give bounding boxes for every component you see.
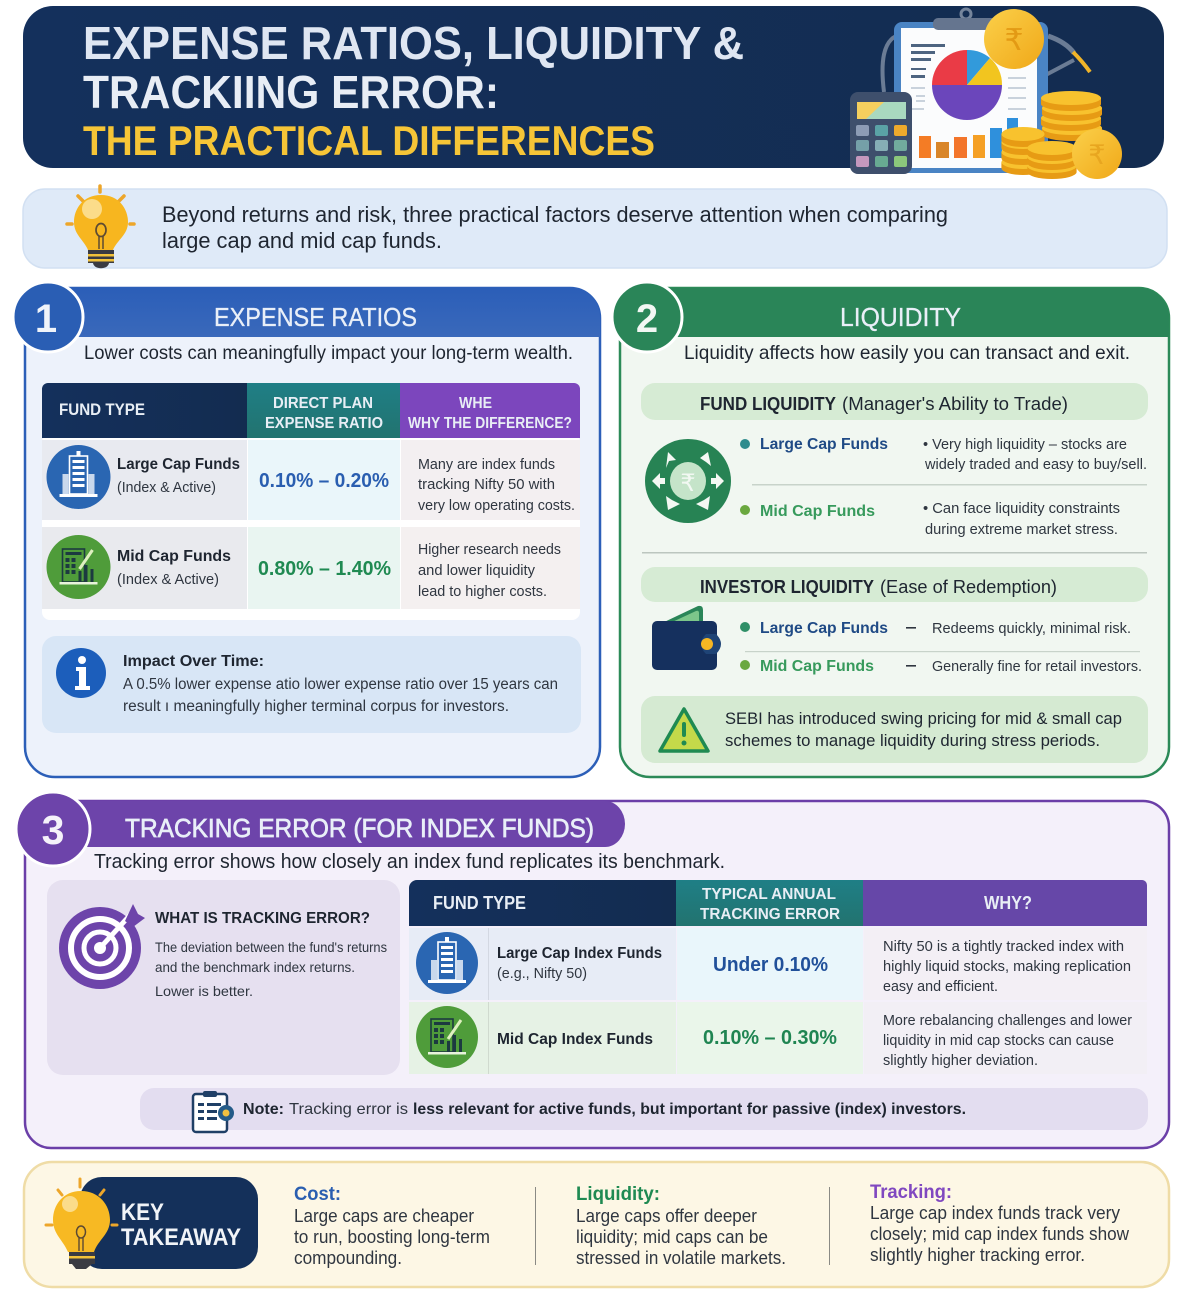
row: mid cap funds: lead to higher costs.: [418, 583, 547, 600]
takeaway: cost: Large caps are cheaper: [294, 1206, 474, 1226]
row: mid cap index funds: Mid Cap Index Funds: [497, 1031, 653, 1048]
row: large cap funds: tracking Nifty 50 with: [418, 476, 555, 493]
icon: rupee flow: ₹: [680, 469, 696, 497]
fund liquidity: mid cap: [740, 501, 1120, 538]
panel: expense ratios: [13, 282, 600, 777]
title: [83, 17, 744, 164]
tracking error table: [409, 880, 1147, 1074]
callout: impact over time: Impact Over Time:: [123, 653, 264, 670]
table header labels: EXPENSE RATIO: [265, 415, 383, 432]
card: what is tracking error: The deviation between the fund's returns: [155, 939, 387, 955]
number badge 1: 1: [35, 297, 57, 341]
table header labels: DIRECT PLAN: [273, 395, 373, 412]
number badge 2: [612, 282, 682, 352]
section: investor liquidity: (Ease of Redemption): [880, 577, 1057, 597]
row: large cap index funds: (e.g., Nifty 50): [497, 966, 587, 982]
title: TRACKIING ERROR:: [83, 66, 499, 118]
illustration: report, calculator and coins: ₹: [1004, 23, 1024, 58]
table header labels: TRACKING ERROR: [700, 906, 840, 923]
row: mid cap funds: 0.80% – 1.40%: [258, 558, 391, 580]
row: mid cap funds: and lower liquidity: [418, 562, 535, 579]
row: mid cap index funds: 0.10% – 0.30%: [703, 1027, 837, 1049]
note bar: [140, 1088, 1148, 1132]
row: mid cap funds: (Index & Active): [117, 571, 219, 588]
table header labels: FUND TYPE: [59, 400, 145, 419]
fund liquidity: large cap: [740, 436, 1147, 473]
table header labels: TYPICAL ANNUAL: [702, 886, 836, 903]
fund liquidity: mid cap: during extreme market stress.: [925, 522, 1118, 538]
section: investor liquidity: INVESTOR LIQUIDITY: [700, 577, 874, 597]
key takeaway badge: KEY: [121, 1199, 164, 1226]
illustration: report, calculator and coins: ₹: [1088, 140, 1106, 171]
table header labels: WHY?: [984, 893, 1032, 913]
row: large cap index funds: Large Cap Index Funds: [497, 945, 662, 962]
card: what is tracking error: WHAT IS TRACKING ERROR?: [155, 910, 370, 927]
takeaway: cost: Cost:: [294, 1184, 341, 1205]
icon: target: [59, 904, 145, 989]
investor liquidity: mid cap: Mid Cap Funds: [760, 658, 874, 675]
takeaway: liquidity: Large caps offer deeper: [576, 1206, 757, 1226]
takeaway: tracking: slightly higher tracking error.: [870, 1245, 1085, 1265]
table header labels: FUND TYPE: [433, 893, 526, 913]
table header labels: WHY THE DIFFERENCE?: [408, 415, 572, 432]
number badge 3: 3: [42, 807, 64, 853]
icon: rupee flow: [645, 439, 731, 523]
table header labels: [433, 886, 1032, 923]
row: large cap funds: Many are index funds: [418, 456, 555, 473]
row: large cap funds: Large Cap Funds: [117, 456, 240, 473]
table header labels: [59, 395, 572, 432]
number badge 1: [13, 282, 83, 352]
row: mid cap index funds: liquidity in mid cap stocks can cause: [883, 1033, 1114, 1049]
illustration: report, calculator and coins: [850, 9, 1122, 179]
takeaway: tracking: closely; mid cap index funds show: [870, 1224, 1130, 1244]
table header labels: WHE: [459, 395, 492, 412]
row: large cap funds: very low operating costs.: [418, 497, 575, 514]
investor liquidity: mid cap: Generally fine for retail investors.: [932, 659, 1142, 675]
takeaway: tracking: Tracking:: [870, 1182, 952, 1203]
card: what is tracking error: [47, 880, 400, 1075]
icon: wallet: [652, 606, 721, 670]
takeaway: tracking: Large cap index funds track very: [870, 1203, 1120, 1223]
callout: impact over time: result ı meaningfully higher terminal corpus for investors.: [123, 698, 509, 715]
panel: key takeaway: [24, 1162, 1169, 1287]
intro text: large cap and mid cap funds.: [162, 228, 442, 253]
row: large cap funds: [42, 440, 580, 520]
fund liquidity: large cap: widely traded and easy to buy/sell.: [924, 457, 1147, 473]
row: mid cap index funds: More rebalancing challenges and lower: [883, 1013, 1132, 1029]
intro callout: [23, 186, 1167, 268]
subtitle: Lower costs can meaningfully impact your long-term wealth.: [84, 342, 573, 364]
key takeaway badge: [46, 1177, 258, 1269]
intro text: Beyond returns and risk, three practical factors deserve attention when comparing: [162, 202, 948, 227]
row: large cap index funds: [409, 928, 1147, 1000]
header banner: [23, 6, 1164, 179]
takeaway: tracking: [870, 1182, 1130, 1265]
takeaway: cost: compounding.: [294, 1248, 402, 1268]
fund liquidity: mid cap: Mid Cap Funds: [760, 503, 875, 520]
callout: impact over time: A 0.5% lower expense atio lower expense ratio over 15 years can: [123, 676, 558, 693]
investor liquidity: large cap: [740, 620, 1131, 637]
title: THE PRACTICAL DIFFERENCES: [83, 117, 655, 164]
row: large cap index funds: Nifty 50 is a tightly tracked index with: [883, 939, 1124, 955]
number badge 3: [16, 792, 90, 866]
icon: light bulb: [67, 186, 134, 268]
row: mid cap index funds: [409, 1002, 1147, 1074]
section: fund liquidity: (Manager's Ability to Trade): [842, 394, 1068, 414]
title: EXPENSE RATIOS, LIQUIDITY &: [83, 17, 744, 69]
note bar: Tracking error is: [289, 1101, 408, 1118]
expense ratio table: [42, 383, 580, 620]
row: large cap index funds: highly liquid stocks, making replication: [883, 959, 1131, 975]
card: what is tracking error: Lower is better.: [155, 983, 253, 999]
takeaway: cost: to run, boosting long-term: [294, 1227, 490, 1247]
callout: SEBI swing pricing: [641, 696, 1148, 763]
key takeaway badge: TAKEAWAY: [121, 1224, 241, 1251]
callout: SEBI swing pricing: schemes to manage liquidity during stress periods.: [725, 732, 1100, 750]
takeaway: liquidity: [576, 1184, 786, 1268]
section: investor liquidity: [641, 567, 1148, 675]
takeaway: liquidity: stressed in volatile markets.: [576, 1248, 786, 1268]
row: large cap funds: 0.10% – 0.20%: [259, 470, 389, 492]
investor liquidity: large cap: Large Cap Funds: [760, 620, 888, 637]
fund liquidity: large cap: Large Cap Funds: [760, 436, 888, 453]
icon: clipboard: [193, 1091, 234, 1132]
intro text: [162, 202, 948, 253]
investor liquidity: large cap: Redeems quickly, minimal risk.: [932, 621, 1131, 637]
fund liquidity: large cap: • Very high liquidity – stocks are: [923, 437, 1127, 453]
note bar: less relevant for active funds, but important for passive (index) investors.: [413, 1101, 966, 1118]
note bar: Note:: [243, 1101, 284, 1118]
takeaway: liquidity: liquidity; mid caps can be: [576, 1227, 768, 1247]
row: mid cap funds: [42, 527, 580, 609]
subtitle: Tracking error shows how closely an index fund replicates its benchmark.: [94, 851, 725, 873]
takeaway: cost: [294, 1184, 490, 1268]
row: mid cap funds: Higher research needs: [418, 541, 561, 558]
heading: tracking error: TRACKING ERROR (FOR INDEX FUNDS): [125, 813, 594, 843]
subtitle: Liquidity affects how easily you can transact and exit.: [684, 342, 1130, 364]
row: mid cap funds: Mid Cap Funds: [117, 548, 231, 565]
icon: light bulb: [46, 1179, 117, 1269]
icon: info: [56, 648, 106, 698]
heading: expense ratios: EXPENSE RATIOS: [214, 302, 417, 332]
callout: impact over time: [42, 636, 581, 733]
row: large cap index funds: easy and efficient.: [883, 979, 998, 995]
panel: tracking error: [16, 792, 1169, 1148]
section: fund liquidity: FUND LIQUIDITY: [700, 394, 836, 414]
row: large cap funds: (Index & Active): [117, 479, 216, 496]
icon: warning triangle: [660, 709, 708, 751]
fund liquidity: mid cap: • Can face liquidity constraints: [923, 501, 1120, 517]
takeaway: liquidity: Liquidity:: [576, 1184, 660, 1205]
section: fund liquidity: [641, 383, 1148, 538]
investor liquidity: mid cap: [740, 658, 1142, 675]
panel: liquidity: [612, 282, 1169, 777]
number badge 2: 2: [636, 297, 658, 341]
row: large cap index funds: Under 0.10%: [713, 954, 828, 976]
heading: liquidity: LIQUIDITY: [840, 302, 961, 332]
card: what is tracking error: and the benchmark index returns.: [155, 959, 355, 975]
row: mid cap index funds: slightly higher deviation.: [883, 1053, 1038, 1069]
callout: SEBI swing pricing: SEBI has introduced swing pricing for mid & small cap: [725, 710, 1122, 728]
